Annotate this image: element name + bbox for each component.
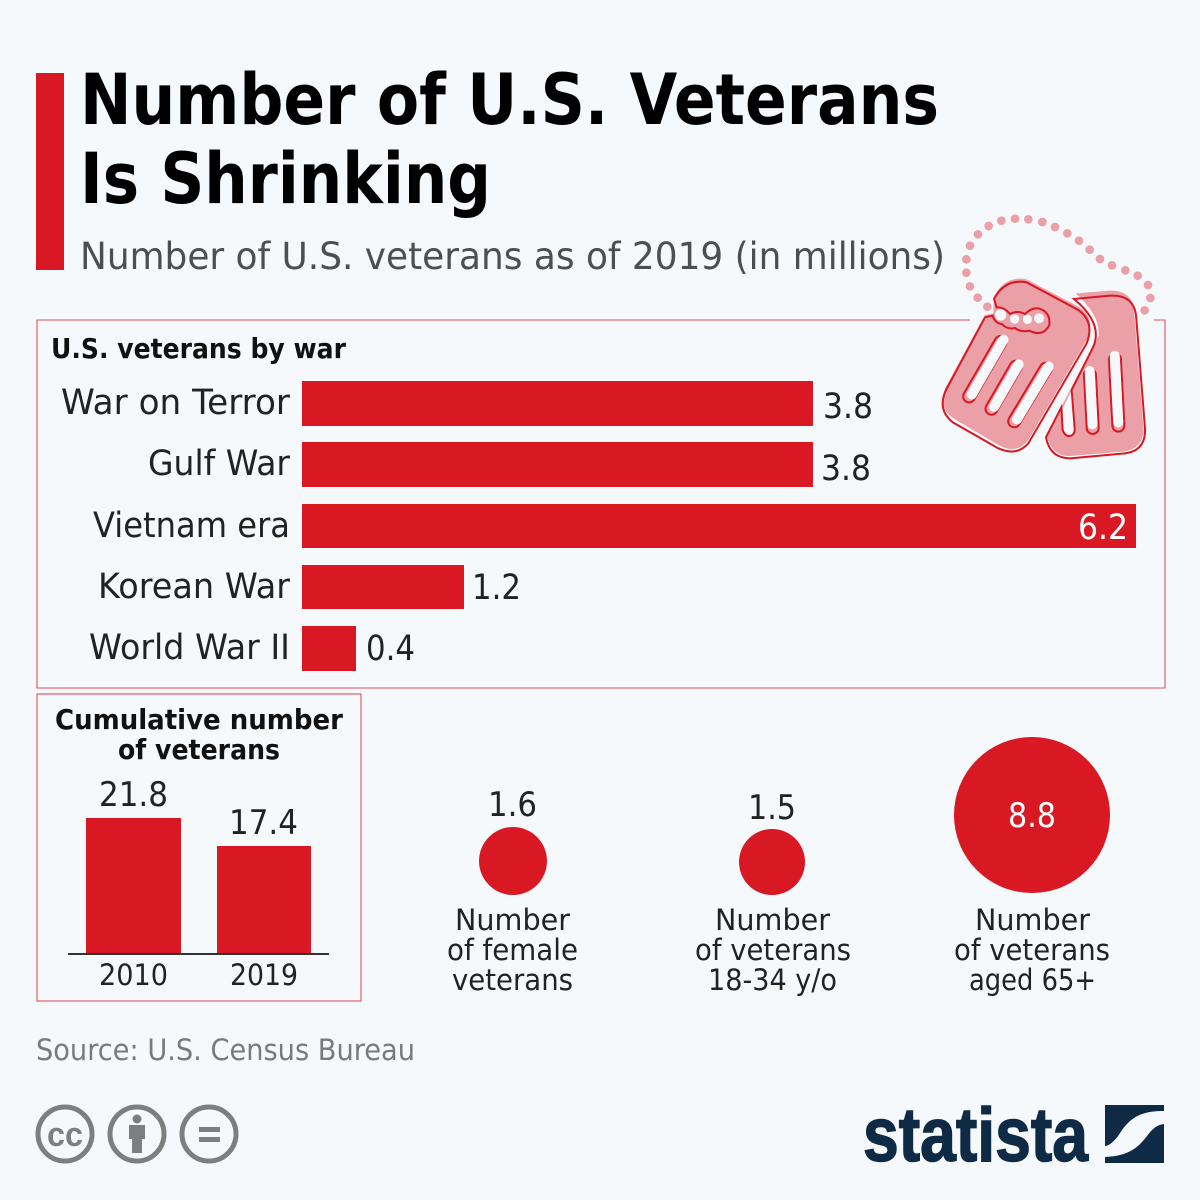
stat: female veterans: Number	[455, 903, 570, 937]
stat: veterans aged 65+: 8.8	[1008, 796, 1056, 836]
stat: veterans aged 65+: of veterans	[954, 933, 1110, 967]
stat: veterans 18-34: Number	[715, 903, 830, 937]
bar chart: 2010 vs 2019	[68, 775, 329, 992]
bar chart: 2010 vs 2019: 21.8	[99, 775, 168, 815]
source: Source: U.S. Census Bureau	[36, 1033, 415, 1067]
bar chart: veterans by war: 1.2	[472, 568, 521, 608]
icon: dog tags	[943, 214, 1155, 458]
bar chart: veterans by war: World War II	[89, 628, 290, 668]
icon: creative commons licence	[38, 1107, 236, 1161]
bar chart: veterans by war	[61, 381, 1136, 671]
subtitle: Number of U.S. veterans as of 2019 (in millions)	[80, 235, 945, 278]
title accent bar	[36, 73, 64, 270]
icon: creative commons licence: cc	[47, 1116, 83, 1154]
bar chart: veterans by war: 6.2	[1078, 508, 1128, 548]
logo: statista: statista	[863, 1093, 1089, 1178]
bar chart: veterans by war: War on Terror	[61, 383, 291, 423]
stat: female veterans: of female	[447, 933, 578, 967]
bar chart: veterans by war: 3.8	[821, 449, 871, 489]
back tag	[1046, 291, 1145, 458]
title: Is Shrinking	[80, 138, 491, 220]
panel: U.S. veterans by war	[37, 320, 1165, 688]
stat: veterans 18-34: 1.5	[748, 788, 796, 828]
stat: veterans 18-34: of veterans	[695, 933, 851, 967]
panel heading: U.S. veterans by war	[51, 332, 346, 365]
front tag	[943, 279, 1090, 452]
stat: veterans aged 65+: aged 65+	[969, 963, 1096, 997]
title: Number of U.S. Veterans	[80, 59, 939, 141]
bar chart: veterans by war: Gulf War	[148, 444, 291, 484]
stat: veterans 18-34: 18-34 y/o	[708, 963, 837, 997]
panel heading: Cumulative number	[55, 703, 343, 736]
bar chart: veterans by war: 3.8	[823, 387, 873, 427]
bar chart: veterans by war: 0.4	[366, 629, 415, 669]
panel: cumulative number of veterans	[37, 694, 361, 1001]
bar chart: 2010 vs 2019: 2010	[99, 958, 168, 992]
bar chart: 2010 vs 2019: 17.4	[229, 803, 298, 843]
bar chart: veterans by war: Vietnam era	[93, 506, 290, 546]
stat: veterans 18-34	[695, 788, 851, 997]
bar chart: 2010 vs 2019: 2019	[230, 958, 298, 992]
panel heading	[55, 703, 343, 766]
stat: female veterans	[447, 785, 578, 997]
panel heading: of veterans	[118, 733, 280, 766]
stat: veterans aged 65+	[954, 737, 1110, 997]
title	[80, 59, 939, 220]
bar chart: veterans by war: Korean War	[98, 567, 291, 607]
stat: female veterans: 1.6	[488, 785, 537, 825]
stat: female veterans: veterans	[452, 963, 573, 997]
stat: veterans aged 65+: Number	[975, 903, 1090, 937]
